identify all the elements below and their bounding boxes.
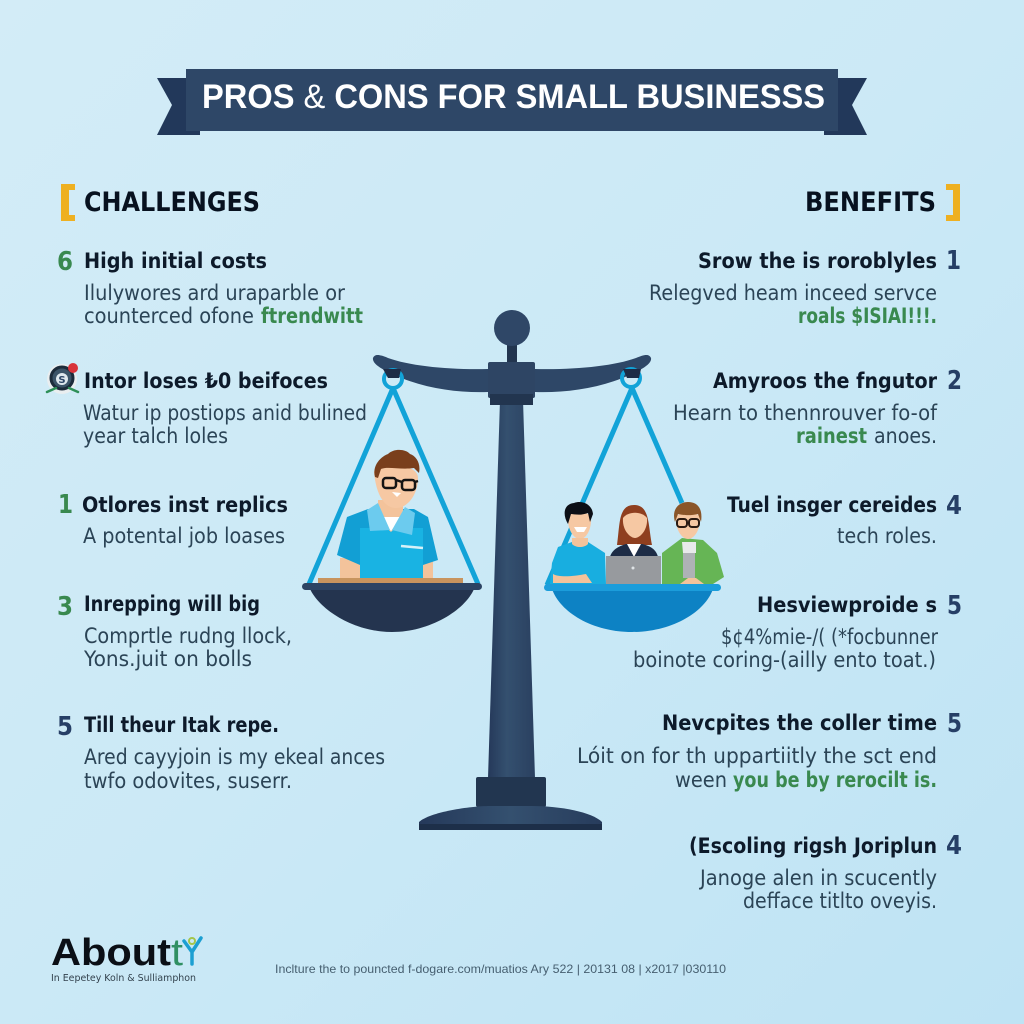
scale beam xyxy=(373,355,651,405)
challenge item 2 xyxy=(83,369,367,448)
footer source note: Inclture the to pouncted f-dogare.com/muatios Ary 522 | 20131 08 | x2017 |030110 xyxy=(275,962,726,976)
challenge item 1 xyxy=(57,247,363,328)
benefit item 3: tech roles. xyxy=(837,524,937,548)
icon: badge with coin: S xyxy=(58,375,66,386)
benefit item 4: Hesviewproide s xyxy=(757,593,937,617)
challenge item 4: Yons.juit on bolls xyxy=(83,647,252,671)
left hanger and ropes xyxy=(309,369,478,584)
benefit item 5: 5 xyxy=(947,709,962,739)
benefit item 5: Lóit on for th uppartiitly the sct end xyxy=(577,744,937,768)
benefit item 2: anoes. xyxy=(874,424,937,448)
benefit item 6 xyxy=(689,831,962,913)
challenges heading xyxy=(61,184,260,221)
panel: benefits xyxy=(577,184,962,913)
benefit item 6: Janoge alen in scucently xyxy=(698,866,937,890)
right hanger and ropes xyxy=(547,369,682,585)
challenge item 2: Intor loses ₺0 beifoces xyxy=(84,369,328,393)
benefit item 3: Tuel insger cereides xyxy=(727,493,937,517)
benefit item 4: $¢4%mie-/( (*focbunner xyxy=(721,625,938,649)
person: woman xyxy=(610,505,658,557)
scale top ball xyxy=(494,310,530,364)
benefit item 5: ween xyxy=(675,768,727,792)
challenge item 4: Inrepping will big xyxy=(84,592,260,616)
benefit item 5: you be by rerocilt is. xyxy=(733,768,937,792)
challenge item 2: Watur ip postiops anid bulined xyxy=(83,401,367,425)
logo: t xyxy=(171,932,183,974)
logo: About xyxy=(51,932,171,974)
title text: PROS & CONS FOR SMALL BUSINESSS xyxy=(202,78,825,116)
scale column and base xyxy=(419,400,602,830)
benefit item 5 xyxy=(577,709,962,792)
logo: In Eepetey Koln & Sulliamphon xyxy=(51,973,196,984)
challenge item 3: A potental job loases xyxy=(83,524,285,548)
challenge item 3: Otlores inst replics xyxy=(82,493,288,517)
right pan with team xyxy=(544,369,724,632)
benefit item 3 xyxy=(727,491,962,548)
challenge item 5: Till theur Itak repe. xyxy=(84,713,279,737)
balance scale xyxy=(302,310,724,830)
challenge item 1: Ilulywores ard uraparble or xyxy=(84,281,345,305)
benefit item 4: 5 xyxy=(947,591,962,621)
left pan with person xyxy=(302,369,482,632)
benefit item 1 xyxy=(649,246,961,328)
benefit item 3: 4 xyxy=(946,491,962,521)
challenge item 4: Comprtle rudng llock, xyxy=(84,624,292,648)
benefit item 2: rainest xyxy=(796,424,867,448)
left pan bowl xyxy=(302,583,482,632)
challenge item 1: 6 xyxy=(57,247,73,277)
icon: badge with coin xyxy=(47,363,78,394)
benefit item 2: 2 xyxy=(947,366,962,396)
challenge item 4: 3 xyxy=(57,592,73,622)
logo xyxy=(51,932,201,984)
benefit item 2: Hearn to thennrouver fo-of xyxy=(673,401,938,425)
challenge item 1: High initial costs xyxy=(84,249,267,273)
title banner xyxy=(157,69,867,135)
laptop xyxy=(606,556,661,584)
benefit item 1: 1 xyxy=(946,246,961,276)
benefit item 2: Amyroos the fngutor xyxy=(713,369,938,393)
challenge item 2: year talch loles xyxy=(83,424,228,448)
challenge item 4 xyxy=(57,592,292,671)
benefit item 1: Srow the is roroblyles xyxy=(698,249,937,273)
challenge item 5 xyxy=(57,712,385,793)
challenge item 5: Ared cayyjoin is my ekeal ances xyxy=(84,745,385,769)
benefit item 6: defface titlto oveyis. xyxy=(743,889,937,913)
person: man in blue shirt xyxy=(550,502,606,584)
challenges heading: CHALLENGES xyxy=(84,187,260,218)
benefit item 5: Nevcpites the coller time xyxy=(662,711,937,735)
benefit item 6: (Escoling rigsh Joriplun xyxy=(689,834,937,858)
benefits heading: BENEFITS xyxy=(805,187,936,218)
person: man with glasses xyxy=(337,450,438,580)
challenge item 1: ftrendwitt xyxy=(261,304,363,328)
benefit item 1: roals $ISIAI!!!. xyxy=(798,304,937,328)
challenge item 3 xyxy=(58,490,288,548)
challenge item 5: twfo odovites, suserr. xyxy=(84,769,292,793)
benefit item 1: Relegved heam inceed servce xyxy=(649,281,937,305)
panel: challenges xyxy=(47,184,385,793)
right pan bowl xyxy=(544,584,721,632)
left plank xyxy=(318,578,463,584)
benefit item 6: 4 xyxy=(946,831,962,861)
challenge item 1: counterced ofone xyxy=(84,304,254,328)
challenge item 3: 1 xyxy=(58,490,73,520)
benefit item 2 xyxy=(673,366,962,448)
benefit item 4 xyxy=(633,591,962,672)
benefit item 4: boinote coring-(ailly ento toat.) xyxy=(633,648,936,672)
challenge item 5: 5 xyxy=(57,712,73,742)
person: man in green jacket xyxy=(662,502,724,584)
